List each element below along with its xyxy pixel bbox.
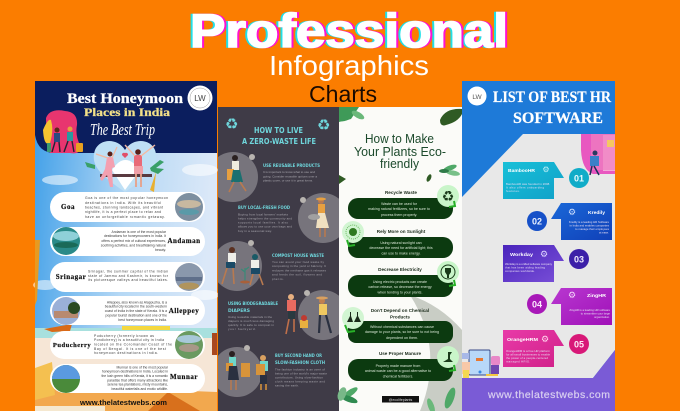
step: sunlight: decrease the need for artificial light; this bbox=[369, 246, 433, 250]
item 01: BambooHR: It also offers onboarding bbox=[506, 186, 544, 190]
heading: Your Plants Eco- bbox=[354, 145, 446, 159]
illustration: gardening couple bbox=[286, 294, 331, 334]
row: Munnar: honeymoon destinations in India. Located in bbox=[102, 370, 168, 374]
step: sunlight: can use to make energy. bbox=[381, 252, 421, 256]
step: recycle waste: Recycle Waste bbox=[385, 190, 417, 195]
item 02: Kredily: to manage their employees bbox=[575, 227, 610, 231]
item 02: Kredily bbox=[527, 203, 612, 240]
step: biodegradable diapers: your backyard. bbox=[228, 327, 256, 331]
title: SOFTWARE bbox=[513, 110, 603, 127]
step: recycle waste bbox=[348, 185, 459, 219]
row: Alleppey: coast of India in the state of Kerala. It is a bbox=[105, 309, 167, 313]
step: chemical products bbox=[342, 307, 453, 343]
item 02: Kredily: Kredily bbox=[588, 210, 605, 215]
heading bbox=[242, 126, 316, 146]
step: compost house waste: You can avoid your food waste by bbox=[272, 260, 324, 264]
row: Srinagar: Srinagar bbox=[56, 273, 86, 281]
step: recycle waste: making natural fertilizers, so be sure to bbox=[368, 207, 430, 211]
item 04: ZingHR: 04 bbox=[532, 300, 542, 310]
row: Munnar: serene tea plantations, misty mountains, bbox=[107, 382, 168, 386]
row: Alleppey: Alleppey, also known as Alappuzha, is a bbox=[107, 300, 167, 304]
item 05: OrangeHRM: managed HRIS. bbox=[506, 360, 530, 364]
step: recycle waste: process them properly. bbox=[381, 213, 417, 217]
item 02: Kredily: 02 bbox=[532, 216, 542, 226]
step: chemical products: damage to your plants, so be sure to not being bbox=[365, 330, 439, 334]
step: second hand cloth bbox=[275, 353, 327, 388]
step: proper manure: animal waste can be a good alternative to bbox=[365, 369, 431, 373]
logo bbox=[468, 86, 486, 106]
step: chemical products: Don't Depend on Chemical bbox=[371, 308, 429, 313]
item 04: ZingHR: to streamline your large bbox=[581, 312, 610, 316]
heading: A ZERO-WASTE LIFE bbox=[242, 137, 316, 146]
step: second hand cloth: SLOW-FASHION CLOTH bbox=[275, 360, 325, 366]
step: compost house waste: COMPOST HOUSE WASTE bbox=[272, 253, 324, 259]
step: chemical products: Products bbox=[390, 314, 410, 320]
step: sunlight bbox=[342, 221, 453, 258]
item 01: BambooHR: BambooHR bbox=[508, 168, 536, 173]
step: proper manure: chemical fertilizers. bbox=[383, 374, 413, 378]
step: reusable products: going. Consider reusable options over a bbox=[263, 174, 317, 178]
step: local fresh food bbox=[238, 205, 292, 233]
item 02: Kredily: in India and enables companies bbox=[570, 224, 610, 228]
item 05: OrangeHRM: OrangeHRM bbox=[507, 337, 538, 342]
illustration: profile with person bbox=[581, 134, 615, 175]
step: electricity bbox=[348, 261, 459, 297]
heading bbox=[354, 132, 446, 171]
step: reusable products: It is important to know what to use and bbox=[263, 170, 315, 174]
item 04: ZingHR: organization. bbox=[594, 315, 610, 319]
step: local fresh food: buy in a seasonal way. bbox=[238, 229, 272, 233]
row: Puducherry: Bay of Bengal. It is one of the best bbox=[94, 347, 166, 351]
title: Professional: Professional bbox=[192, 4, 510, 57]
logo bbox=[188, 86, 212, 110]
heading: The Best Trip: The Best Trip bbox=[90, 120, 155, 139]
step: second hand cloth: BUY SECOND HAND OR bbox=[275, 353, 322, 359]
row: Goa: beaches, stunning landscapes, and vibrant bbox=[85, 206, 163, 210]
step: chemical products: Without chemical substances can cause bbox=[370, 325, 434, 329]
item 01: BambooHR: 01 bbox=[574, 174, 584, 184]
step: local fresh food: supports local families. It also bbox=[238, 220, 288, 224]
leaves bbox=[336, 107, 462, 411]
row: Puducherry: located on the Coromandel Coast of the bbox=[94, 342, 172, 346]
step: biodegradable diapers bbox=[228, 301, 278, 331]
item 04: ZingHR: ZingHR is a leading HR software bbox=[569, 308, 610, 312]
beach scene bbox=[35, 240, 217, 411]
step: compost house waste bbox=[272, 253, 326, 281]
row: Alleppey bbox=[50, 296, 205, 325]
icons: recycle bbox=[225, 115, 330, 134]
row: Munnar: the lush green hills of Kerala, it is a romantic bbox=[101, 374, 168, 378]
row: Alleppey: Alleppey bbox=[169, 307, 199, 315]
item 01: BambooHR: BambooHR was founded in 2008. bbox=[506, 182, 550, 186]
illustration: people with boxes bbox=[226, 351, 268, 390]
subtitle: Infographics: Infographics bbox=[269, 50, 429, 81]
title bbox=[493, 89, 611, 127]
item 03: Workday: 03 bbox=[574, 254, 584, 264]
item 01: BambooHR bbox=[503, 162, 589, 199]
row: Andaman bbox=[50, 227, 205, 256]
row: Alleppey: beautiful city located in the south-western bbox=[105, 304, 167, 308]
heading: Places in India: Places in India bbox=[84, 105, 170, 119]
row: Goa: Goa bbox=[61, 203, 75, 211]
row: Srinagar: Srinagar, the summer capital of the Indian bbox=[88, 270, 168, 274]
background leaf bbox=[410, 295, 462, 411]
heading: How to Make bbox=[365, 132, 434, 146]
step: recycle waste: ♻ bbox=[442, 189, 454, 205]
step: reusable products: USE REUSABLE PRODUCTS bbox=[263, 163, 320, 169]
step: biodegradable diapers: Using reusable materials in the bbox=[228, 315, 272, 319]
step: local fresh food: helps strengthen the community and bbox=[238, 216, 292, 220]
row: Andaman: Andaman is one of the most popular bbox=[112, 230, 167, 234]
hexagon body bbox=[462, 134, 615, 378]
item 04: ZingHR bbox=[527, 288, 612, 325]
step: second hand cloth: The fashion industry is an overt of bbox=[275, 368, 325, 372]
item 02: Kredily: Kredily is a leading HR Software bbox=[569, 220, 609, 224]
clouds bbox=[33, 164, 219, 300]
step: compost house waste: composting in the yard or balcony. It bbox=[272, 264, 326, 268]
illustration: dashboard with robot bbox=[462, 350, 500, 378]
step: proper manure: Properly made manure from bbox=[376, 364, 420, 368]
row: Puducherry: Pondicherry) is a beautiful city in India bbox=[94, 338, 164, 342]
panel: how to live a zero-waste life bbox=[218, 107, 339, 411]
step: sunlight: Using natural sunlight can bbox=[380, 241, 422, 245]
step: reusable products bbox=[263, 163, 320, 182]
step: proper manure: Use Proper Manure bbox=[379, 351, 422, 356]
row: Puducherry: Puducherry bbox=[53, 342, 91, 349]
step: compost house waste: and feeds the soil, flowers and bbox=[272, 272, 322, 276]
step: compost house waste: plants. bbox=[272, 277, 284, 281]
step: sunlight: Rely More on Sunlight bbox=[377, 229, 426, 234]
item 03: Workday: ⚙ bbox=[540, 250, 548, 260]
item 03: Workday: Workday is a unified software company bbox=[505, 262, 553, 266]
icons: recycle: ♻ bbox=[317, 116, 330, 134]
footer url: www.thelatestwebs.com bbox=[79, 398, 167, 407]
panel: make your plants eco-friendly bbox=[336, 107, 462, 411]
step: second hand cloth: contributors. Using slow-fashion bbox=[275, 376, 323, 380]
row: Srinagar bbox=[50, 262, 205, 292]
row: Puducherry: honeymoon destinations in India. bbox=[94, 351, 158, 355]
item 03: Workday: that has been aiding leading bbox=[505, 266, 545, 270]
icons: recycle: ♻ bbox=[225, 115, 238, 133]
step: local fresh food: BUY LOCAL-FRESH FOOD bbox=[238, 205, 290, 211]
item 05: OrangeHRM: 05 bbox=[574, 340, 584, 350]
decorative circles bbox=[218, 152, 339, 397]
title: LIST OF BEST HR bbox=[493, 89, 611, 106]
row: Alleppey: best honeymoon places in India. bbox=[118, 318, 167, 322]
row: Puducherry bbox=[50, 331, 205, 359]
panel: best honeymoon places in India bbox=[33, 81, 219, 411]
item 03: Workday bbox=[503, 245, 589, 282]
heading: Best Honeymoon: Best Honeymoon bbox=[67, 91, 184, 107]
illustration: travelling couple on pink blob bbox=[43, 110, 83, 153]
row: Munnar: Munnar bbox=[170, 373, 198, 381]
row: Andaman: soothing activities, and breathtaking natural bbox=[101, 244, 166, 248]
heading: HOW TO LIVE bbox=[254, 126, 303, 135]
step: reusable products: plastic cover, or use it in great items. bbox=[263, 178, 313, 182]
step: chemical products: dependent on them. bbox=[386, 336, 418, 340]
logo: LW bbox=[194, 94, 206, 103]
step: second hand cloth: saving the earth. bbox=[275, 384, 299, 388]
item 04: ZingHR: ⚙ bbox=[568, 291, 576, 301]
step: recycle waste: Waste can be used for bbox=[381, 202, 418, 206]
row: Goa: have an unforgettable romantic getaway. bbox=[85, 215, 165, 219]
row: Andaman: destinations for honeymooners in India. It bbox=[104, 234, 166, 238]
row: Srinagar: its picturesque valleys and beautiful lakes. bbox=[88, 278, 168, 282]
illustration: woman with basket bbox=[308, 198, 329, 237]
subtitle: Charts: Charts bbox=[309, 81, 377, 107]
title: Professional: Professional bbox=[188, 4, 506, 57]
illustration: planting couple bbox=[222, 247, 263, 285]
row: Andaman: offers a perfect mix of cultural experiences, bbox=[101, 239, 166, 243]
item 04: ZingHR: ZingHR bbox=[587, 293, 607, 298]
row: Munnar: beautiful waterfalls and exotic wildlife. bbox=[111, 387, 168, 391]
row: Andaman: beauty. bbox=[155, 248, 166, 252]
step: compost house waste: reduces the methane gas it releases bbox=[272, 268, 326, 272]
step: biodegradable diapers: DIAPERS bbox=[228, 308, 250, 314]
footer url: www.thelatestwebs.com bbox=[487, 389, 610, 401]
item 02: Kredily: ⚙ bbox=[568, 208, 576, 218]
item 01: BambooHR: ⚙ bbox=[542, 165, 550, 174]
tag: @ecolifeplants bbox=[389, 398, 413, 402]
heading: friendly bbox=[380, 157, 420, 171]
row: Munnar: paradise that offers many attractions like bbox=[107, 378, 168, 382]
tag bbox=[382, 396, 419, 402]
title: Professional: Professional bbox=[190, 4, 508, 57]
row: Munnar bbox=[50, 364, 205, 393]
row: Andaman: Andaman bbox=[167, 237, 201, 245]
panel: list of best HR software bbox=[462, 81, 615, 411]
illustration: heart with couple bbox=[85, 141, 164, 192]
row: Srinagar: state of Jammu and Kashmir, is known for bbox=[88, 274, 169, 278]
item 03: Workday: companies worldwide. bbox=[505, 269, 535, 273]
row: Goa: nightlife, it is a perfect place to relax and bbox=[85, 210, 161, 214]
item 03: Workday: Workday bbox=[510, 252, 534, 257]
row: Munnar: Munnar is one of the most popular bbox=[117, 366, 169, 370]
step: local fresh food: allows you to use your own bags and bbox=[238, 224, 292, 228]
footer band bbox=[462, 350, 615, 411]
step: proper manure bbox=[348, 346, 459, 381]
step: biodegradable diapers: quickly. It is safe to compost in bbox=[228, 323, 274, 327]
step: second hand cloth: cloth means keeping waste and bbox=[275, 380, 325, 384]
item 02: Kredily: at ease. bbox=[599, 230, 609, 234]
logo: LW bbox=[472, 94, 482, 101]
item 05: OrangeHRM: for all small businesses to enable bbox=[506, 352, 550, 356]
step: biodegradable diapers: USING BIODEGRADABLE bbox=[228, 301, 278, 307]
step: electricity: when tending to your plants. bbox=[378, 290, 422, 294]
item 05: OrangeHRM: OrangeHRM is a free HR platform bbox=[506, 349, 551, 353]
step: local fresh food: Buying from local farmers' markets bbox=[238, 212, 288, 216]
item 05: OrangeHRM: the power of a people-centered bbox=[506, 356, 548, 360]
row: Puducherry: Puducherry (formerly known as bbox=[94, 334, 154, 338]
step: biodegradable diapers: diapers is much less damaging bbox=[228, 319, 274, 323]
step: electricity: carbon release, so decrease the energy bbox=[368, 285, 432, 289]
step: electricity: Using electric products can create bbox=[373, 280, 427, 284]
header band bbox=[35, 81, 217, 153]
step: second hand cloth: being one of the world's major waste bbox=[275, 372, 327, 376]
illustration: walking woman bbox=[227, 155, 246, 192]
item 05: OrangeHRM bbox=[503, 330, 589, 367]
item 05: OrangeHRM: ⚙ bbox=[541, 335, 549, 345]
item 01: BambooHR: features. bbox=[506, 189, 520, 193]
row: Goa: Goa is one of the most popular honeymoon bbox=[85, 196, 168, 200]
row: Alleppey: popular tourist destination and one of the bbox=[106, 314, 167, 318]
row: Goa bbox=[50, 192, 205, 222]
row: Goa: destinations in India. With its beautiful bbox=[85, 201, 161, 205]
step: electricity: Decrease Electricity bbox=[378, 267, 422, 272]
